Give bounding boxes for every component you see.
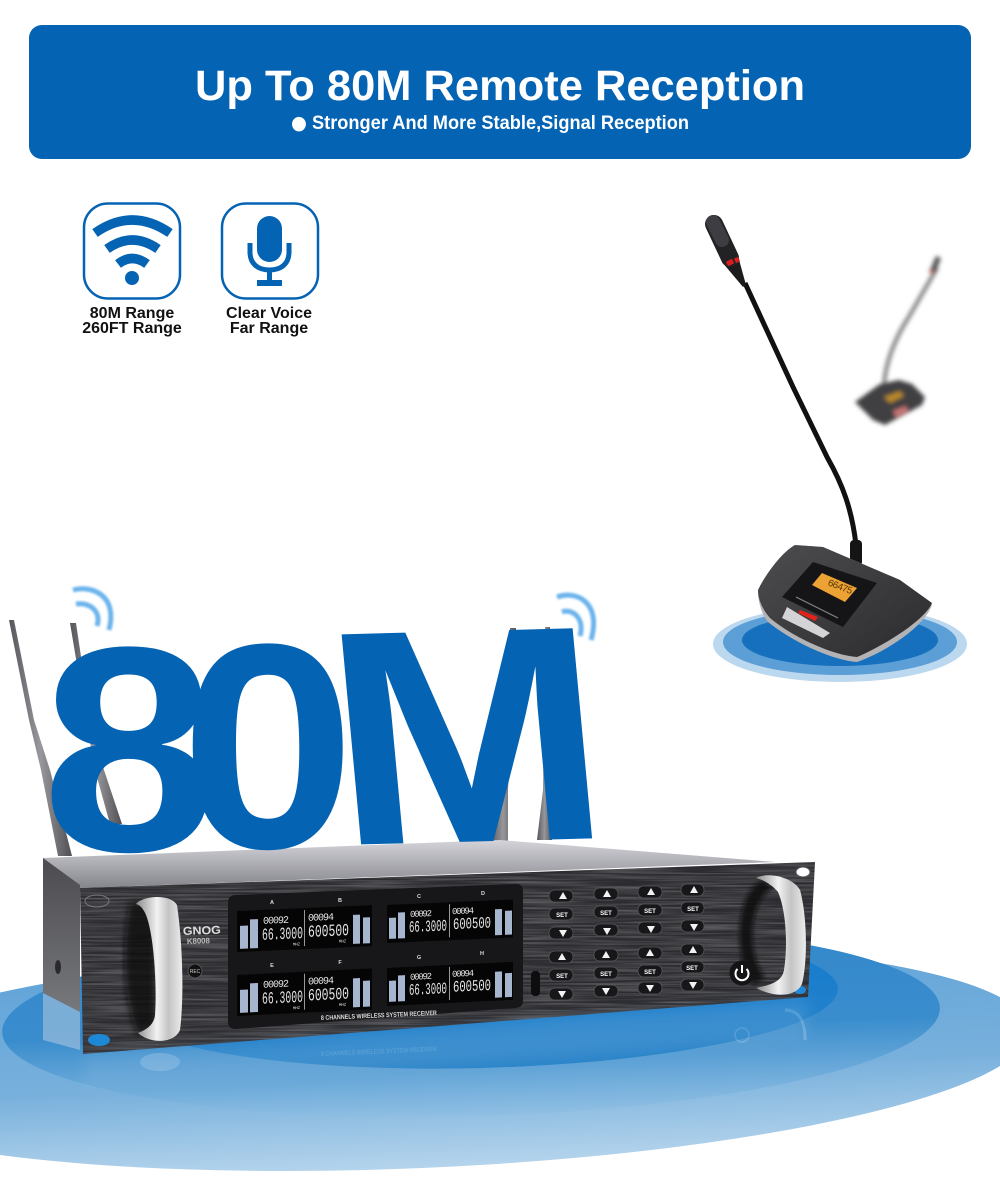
label: clear voice: Clear Voice (226, 305, 312, 322)
big 80M lettering: 8 (40, 586, 218, 913)
LCD channel G and H (387, 962, 513, 1006)
LCD channel A and B (237, 905, 372, 952)
control buttons: SET (556, 913, 568, 919)
control buttons: SET (600, 911, 612, 917)
LCD channel A and B: 00092 (263, 916, 289, 928)
brand logo (183, 925, 221, 946)
LCD channel E and F: 00094 (308, 976, 334, 989)
control buttons: SET (686, 966, 698, 972)
receiver reflection (83, 999, 808, 1090)
label: 80M range: 80M Range (90, 305, 174, 322)
LCD channel E and F (237, 968, 372, 1016)
title: Up To 80M Remote Reception (195, 62, 805, 110)
brand logo: GNOG (183, 925, 221, 938)
LCD channel A and B: 600500 (308, 922, 349, 943)
small round button (188, 964, 202, 978)
LCD channel G and H: 00094 (452, 969, 474, 980)
conference microphone: 66475 (826, 578, 854, 598)
channel letters: E (270, 963, 274, 969)
bottom signal rings (0, 912, 1000, 1192)
left handle (125, 897, 182, 1041)
LCD channel C and D (387, 899, 513, 943)
channel letters: B (338, 898, 342, 904)
signal rings under conference microphone (713, 606, 967, 682)
LCD channel E and F: 600500 (308, 986, 349, 1007)
control buttons: SET (644, 909, 656, 915)
control buttons: SET (556, 974, 568, 980)
big 80M lettering: M (313, 561, 620, 910)
LCD channel E and F: MHZ (293, 1007, 301, 1011)
receiver reflection: 8 CHANNELS WIRELESS SYSTEM RECEIVER (321, 1046, 437, 1058)
power button (730, 960, 754, 986)
channel letters: A (270, 900, 274, 906)
channel letters: C (417, 894, 421, 900)
signal waves right (557, 595, 594, 640)
LCD channel E and F: MHZ (339, 1004, 347, 1008)
blurred distant conference microphone (855, 256, 941, 425)
label: 80M range: 260FT Range (82, 320, 182, 337)
panel caption: 8 CHANNELS WIRELESS SYSTEM RECEIVER (321, 1010, 437, 1022)
LCD channel A and B: MHZ (293, 943, 301, 948)
icon: microphone (222, 204, 318, 298)
LCD channel A and B: 00094 (308, 913, 334, 925)
LCD channel C and D: 600500 (453, 914, 491, 934)
control buttons: SET (644, 970, 656, 976)
control buttons: SET (600, 972, 612, 978)
channel letters (270, 891, 485, 969)
right handle (740, 875, 806, 995)
banner: title panel (29, 25, 971, 159)
LCD channel A and B: MHZ (339, 940, 347, 945)
LCD channel G and H: 600500 (453, 977, 491, 997)
LCD channel A and B: 66.3000 (262, 925, 303, 946)
channel letters: H (480, 951, 484, 957)
receiver front panel (78, 855, 818, 1060)
antennas (9, 620, 552, 856)
small round button: REC (190, 969, 201, 975)
LCD channel E and F: 66.3000 (262, 989, 303, 1010)
signal waves left (73, 589, 111, 630)
control buttons: SET (687, 907, 699, 913)
LCD channel C and D: 00092 (410, 909, 432, 920)
channel letters: G (417, 955, 421, 961)
control buttons (549, 884, 704, 1000)
LCD channel C and D: 66.3000 (409, 917, 447, 937)
LCD channel C and D: 00094 (452, 906, 474, 917)
big 80M lettering (40, 561, 620, 913)
receiver top and side (43, 840, 775, 1050)
LCD channel G and H: 00092 (410, 972, 432, 983)
big 80M lettering: 0 (179, 583, 357, 910)
conference microphone (713, 222, 932, 662)
channel letters: F (338, 960, 342, 966)
channel letters: D (481, 891, 485, 897)
subtitle: ● Stronger And More Stable,Signal Reception (291, 112, 689, 134)
LCD channel E and F: 00092 (263, 979, 289, 992)
LCD display panel (228, 884, 523, 1029)
LCD channel G and H: 66.3000 (409, 980, 447, 1000)
icon: wifi range (84, 204, 180, 298)
brand logo: K8008 (187, 936, 211, 946)
label: clear voice: Far Range (230, 320, 308, 337)
slot (531, 971, 540, 996)
